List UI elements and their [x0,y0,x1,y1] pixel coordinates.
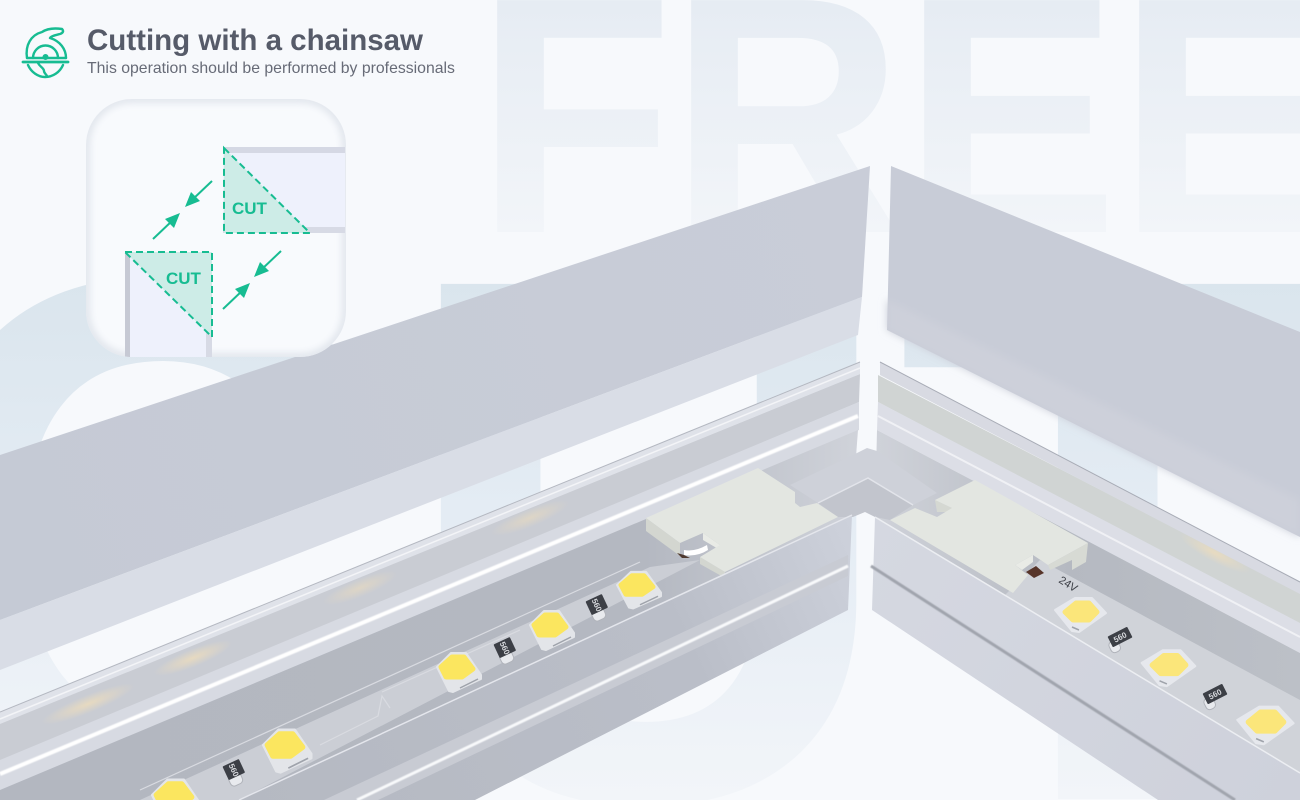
LED 2 [263,730,311,772]
resistor 3 [585,594,611,622]
cut triangle, bottom [125,252,212,337]
LED 8 [1237,707,1294,744]
resistor 2: 560 [498,640,512,657]
LED 4 [530,611,574,650]
LED 3 [437,653,481,692]
right front wall [871,517,1300,800]
left LED strip base [140,560,700,800]
resistors, left strip [222,594,611,787]
label: CUT top: CUT [232,199,268,218]
left cover strip [0,166,870,670]
LED 1 [152,780,200,800]
label: CUT bottom: CUT [166,269,202,288]
arrows, upper pair [153,181,212,239]
resistor 2 [493,637,519,665]
resistor 4: 560 [1112,630,1129,644]
LED 6 [1055,598,1106,632]
left front wall [239,515,852,800]
right cover strip [887,166,1300,537]
voltage marking: 24V [1056,574,1080,595]
bottom-left profile [125,252,212,358]
title: Cutting with a chainsaw [87,24,423,57]
cut triangle, top [224,148,310,233]
right connector plate [890,480,1088,593]
resistor 5: 560 [1207,687,1224,701]
LED 7 [1142,650,1195,686]
resistors, right strip [1105,627,1230,711]
icon: circular saw [23,28,68,77]
resistor 1: 560 [227,762,241,779]
arrows, lower pair [223,251,281,309]
LED 5 [617,572,661,608]
resistor 3: 560 [590,597,604,614]
left strip detail lines [140,562,640,790]
left connector plate [646,468,838,578]
left aluminium channel [0,362,860,800]
subtitle: This operation should be performed by professionals [87,60,455,77]
inset card: cut diagram [86,99,346,358]
corner joint [790,448,937,520]
left LEDs [152,572,661,800]
right aluminium channel [875,362,1300,773]
top-right profile [223,147,345,233]
resistor 1 [222,759,248,787]
right LEDs [1055,598,1294,744]
